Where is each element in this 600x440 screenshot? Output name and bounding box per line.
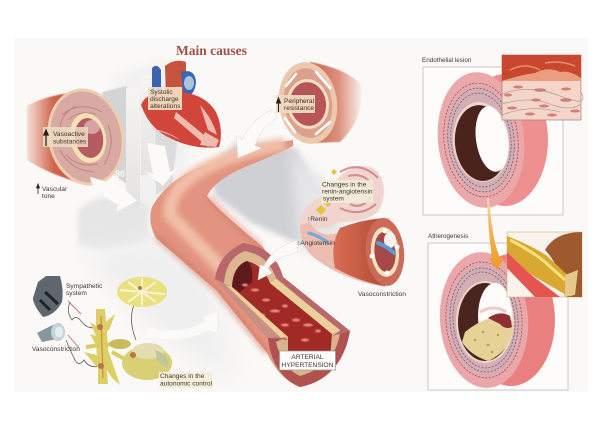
arrow: kidney to artery <box>258 240 298 280</box>
callout: peripheral resistance: resistance <box>284 105 314 112</box>
plaque <box>462 313 513 361</box>
callout: systolic discharge alterations: alterations <box>150 103 181 110</box>
label: Endothelial lesion <box>422 57 472 64</box>
nervous system illustration <box>32 276 172 385</box>
inset: lesion detail <box>502 55 583 120</box>
upper opening wall <box>215 243 350 340</box>
panel: background <box>14 38 588 392</box>
vessel: peripheral resistance <box>274 58 362 148</box>
panel: grey backdrop with cuff and hand: 180 <box>110 169 125 179</box>
callout: systolic discharge alterations: discharge <box>150 96 179 103</box>
callout: changes in the autonomic control: autonomic control <box>160 380 213 388</box>
callout: vasoactive substances: Vasoactive <box>53 131 85 138</box>
panel: endothelial lesion <box>422 55 583 215</box>
main artery <box>150 140 350 387</box>
cut wall strips <box>215 279 288 338</box>
arrow: heart to artery <box>145 143 178 186</box>
nervous system illustration: system <box>66 290 87 297</box>
callout: systolic discharge alterations: Systolic <box>150 89 173 96</box>
label: arterial hypertension: HYPERTENSION <box>282 362 334 369</box>
panel: grey backdrop with cuff and hand: 0 <box>160 158 165 168</box>
arrow: vessel to artery <box>90 177 137 212</box>
label: arterial hypertension: ARTERIAL <box>291 354 324 361</box>
lumen <box>232 261 332 352</box>
vessel: vasoconstriction <box>297 216 407 288</box>
icon: heart <box>141 61 221 148</box>
icon: spinal cord section <box>122 346 172 380</box>
callout: peripheral resistance <box>276 95 315 113</box>
callout: vasoactive substances <box>43 127 88 147</box>
icon: ganglion disc <box>117 277 167 307</box>
inset: plaque detail <box>507 232 582 297</box>
callout: changes in the autonomic control <box>159 372 213 388</box>
callout: changes in renin-angiotensin: Changes in the <box>322 182 367 188</box>
callout: systolic discharge alterations <box>148 87 182 110</box>
ring back wall <box>467 254 555 386</box>
end face <box>215 277 350 387</box>
label: vascular tone <box>36 184 68 200</box>
spinal chain <box>84 309 120 385</box>
label: vasoconstriction right: Vasoconstriction <box>358 291 406 298</box>
panel: grey backdrop with cuff and hand: 90 <box>113 144 123 154</box>
label: vascular tone: tone <box>42 193 55 200</box>
ring face <box>431 68 531 212</box>
labels: Sympathetic <box>66 283 103 290</box>
title: Main causes <box>176 43 247 58</box>
callout: changes in renin-angiotensin <box>321 180 373 203</box>
callout: peripheral resistance: Peripheral <box>284 98 315 105</box>
nerve fibres <box>66 288 140 367</box>
label: angiotensin: ↑Angiotensin <box>297 240 335 247</box>
kidney with renin-angiotensin callout <box>300 166 384 228</box>
icon: grey vessel <box>37 323 64 342</box>
arrow: lesion to atherogenesis <box>487 198 504 270</box>
callout: vasoactive substances: substances <box>53 138 87 146</box>
label: vascular tone: Vascular <box>42 186 68 193</box>
icon: grey heart <box>33 276 63 317</box>
nervous system illustration: Vasoconstriction <box>32 346 80 353</box>
label: arterial hypertension <box>280 351 336 370</box>
ring back wall <box>462 74 548 206</box>
vessel: vascular tone cross-section <box>27 81 133 193</box>
label: Atherogenesis <box>428 233 468 240</box>
callout: changes in renin-angiotensin: renin-angiotensin <box>322 188 373 196</box>
arrow: autonomic control to artery <box>147 311 217 339</box>
panel: atherogenesis <box>428 232 582 391</box>
label: renin: ↑Renin <box>307 216 328 223</box>
callout: changes in the autonomic control: Changes in the <box>160 373 205 380</box>
ring face <box>435 249 533 391</box>
panel: grey backdrop with cuff and hand <box>78 60 345 385</box>
arrow: peripheral vessel to artery <box>236 110 278 158</box>
callout: changes in renin-angiotensin: system <box>323 196 344 202</box>
